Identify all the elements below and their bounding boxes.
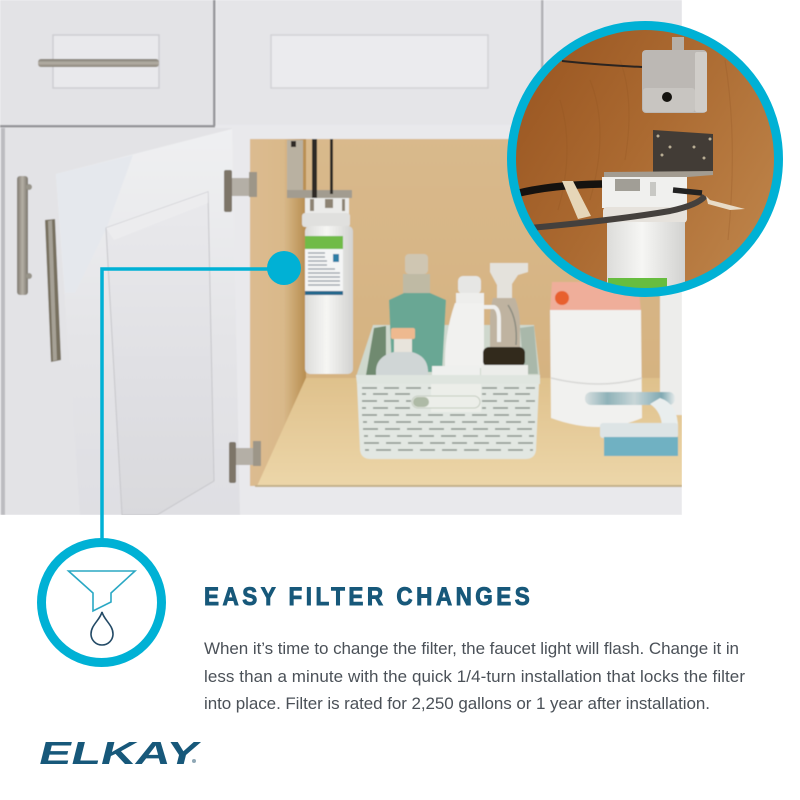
callout connector line — [102, 269, 284, 545]
metal bracket — [604, 130, 713, 180]
dark jar — [481, 347, 528, 376]
trash bin — [550, 282, 682, 427]
upper drawers — [0, 0, 544, 128]
water filter cartridge — [302, 198, 353, 374]
basket inner left weave — [366, 326, 386, 375]
filter body — [602, 177, 687, 292]
black tube with tag — [515, 181, 702, 219]
cabinet interior — [240, 139, 682, 515]
callout dot — [267, 251, 301, 285]
grey tube — [530, 196, 705, 228]
open door — [45, 129, 240, 515]
basket inner right wall — [520, 326, 538, 374]
water drop — [91, 612, 113, 645]
basket interior — [356, 325, 540, 377]
green detergent bottle — [389, 254, 446, 372]
cabinet face — [215, 0, 545, 488]
mounting bracket and sensor in cabinet — [287, 139, 352, 205]
Elkay logo: ELKAY — [35, 735, 203, 771]
inset ring — [512, 26, 778, 292]
icon ring — [42, 542, 162, 662]
wicker basket front — [356, 375, 540, 459]
left closed door — [0, 128, 33, 515]
product photo: open cabinet — [0, 0, 682, 515]
description text: into place. Filter is rated for 2,250 gallons or 1 year after installation. — [204, 694, 710, 713]
inset contents — [515, 37, 745, 292]
detail inset: filter close-up — [511, 25, 779, 293]
paper tag — [706, 196, 745, 210]
description text — [204, 639, 745, 713]
white bottle — [445, 276, 499, 368]
small glass bottle — [376, 328, 428, 378]
spray bottle — [490, 263, 528, 350]
heading: EASY FILTER CHANGES — [204, 583, 530, 611]
inset wood background — [511, 25, 779, 293]
central white box — [432, 366, 480, 377]
hinges — [224, 170, 261, 483]
funnel — [68, 571, 135, 611]
faucet sensor box — [642, 37, 707, 113]
description text: less than a minute with the quick 1/4-turn installation that locks the filter — [204, 667, 745, 686]
description text: When it’s time to change the filter, the faucet light will flash. Change it in — [204, 639, 739, 658]
scrub brush — [585, 392, 678, 456]
icon: funnel and water drop — [42, 542, 162, 662]
